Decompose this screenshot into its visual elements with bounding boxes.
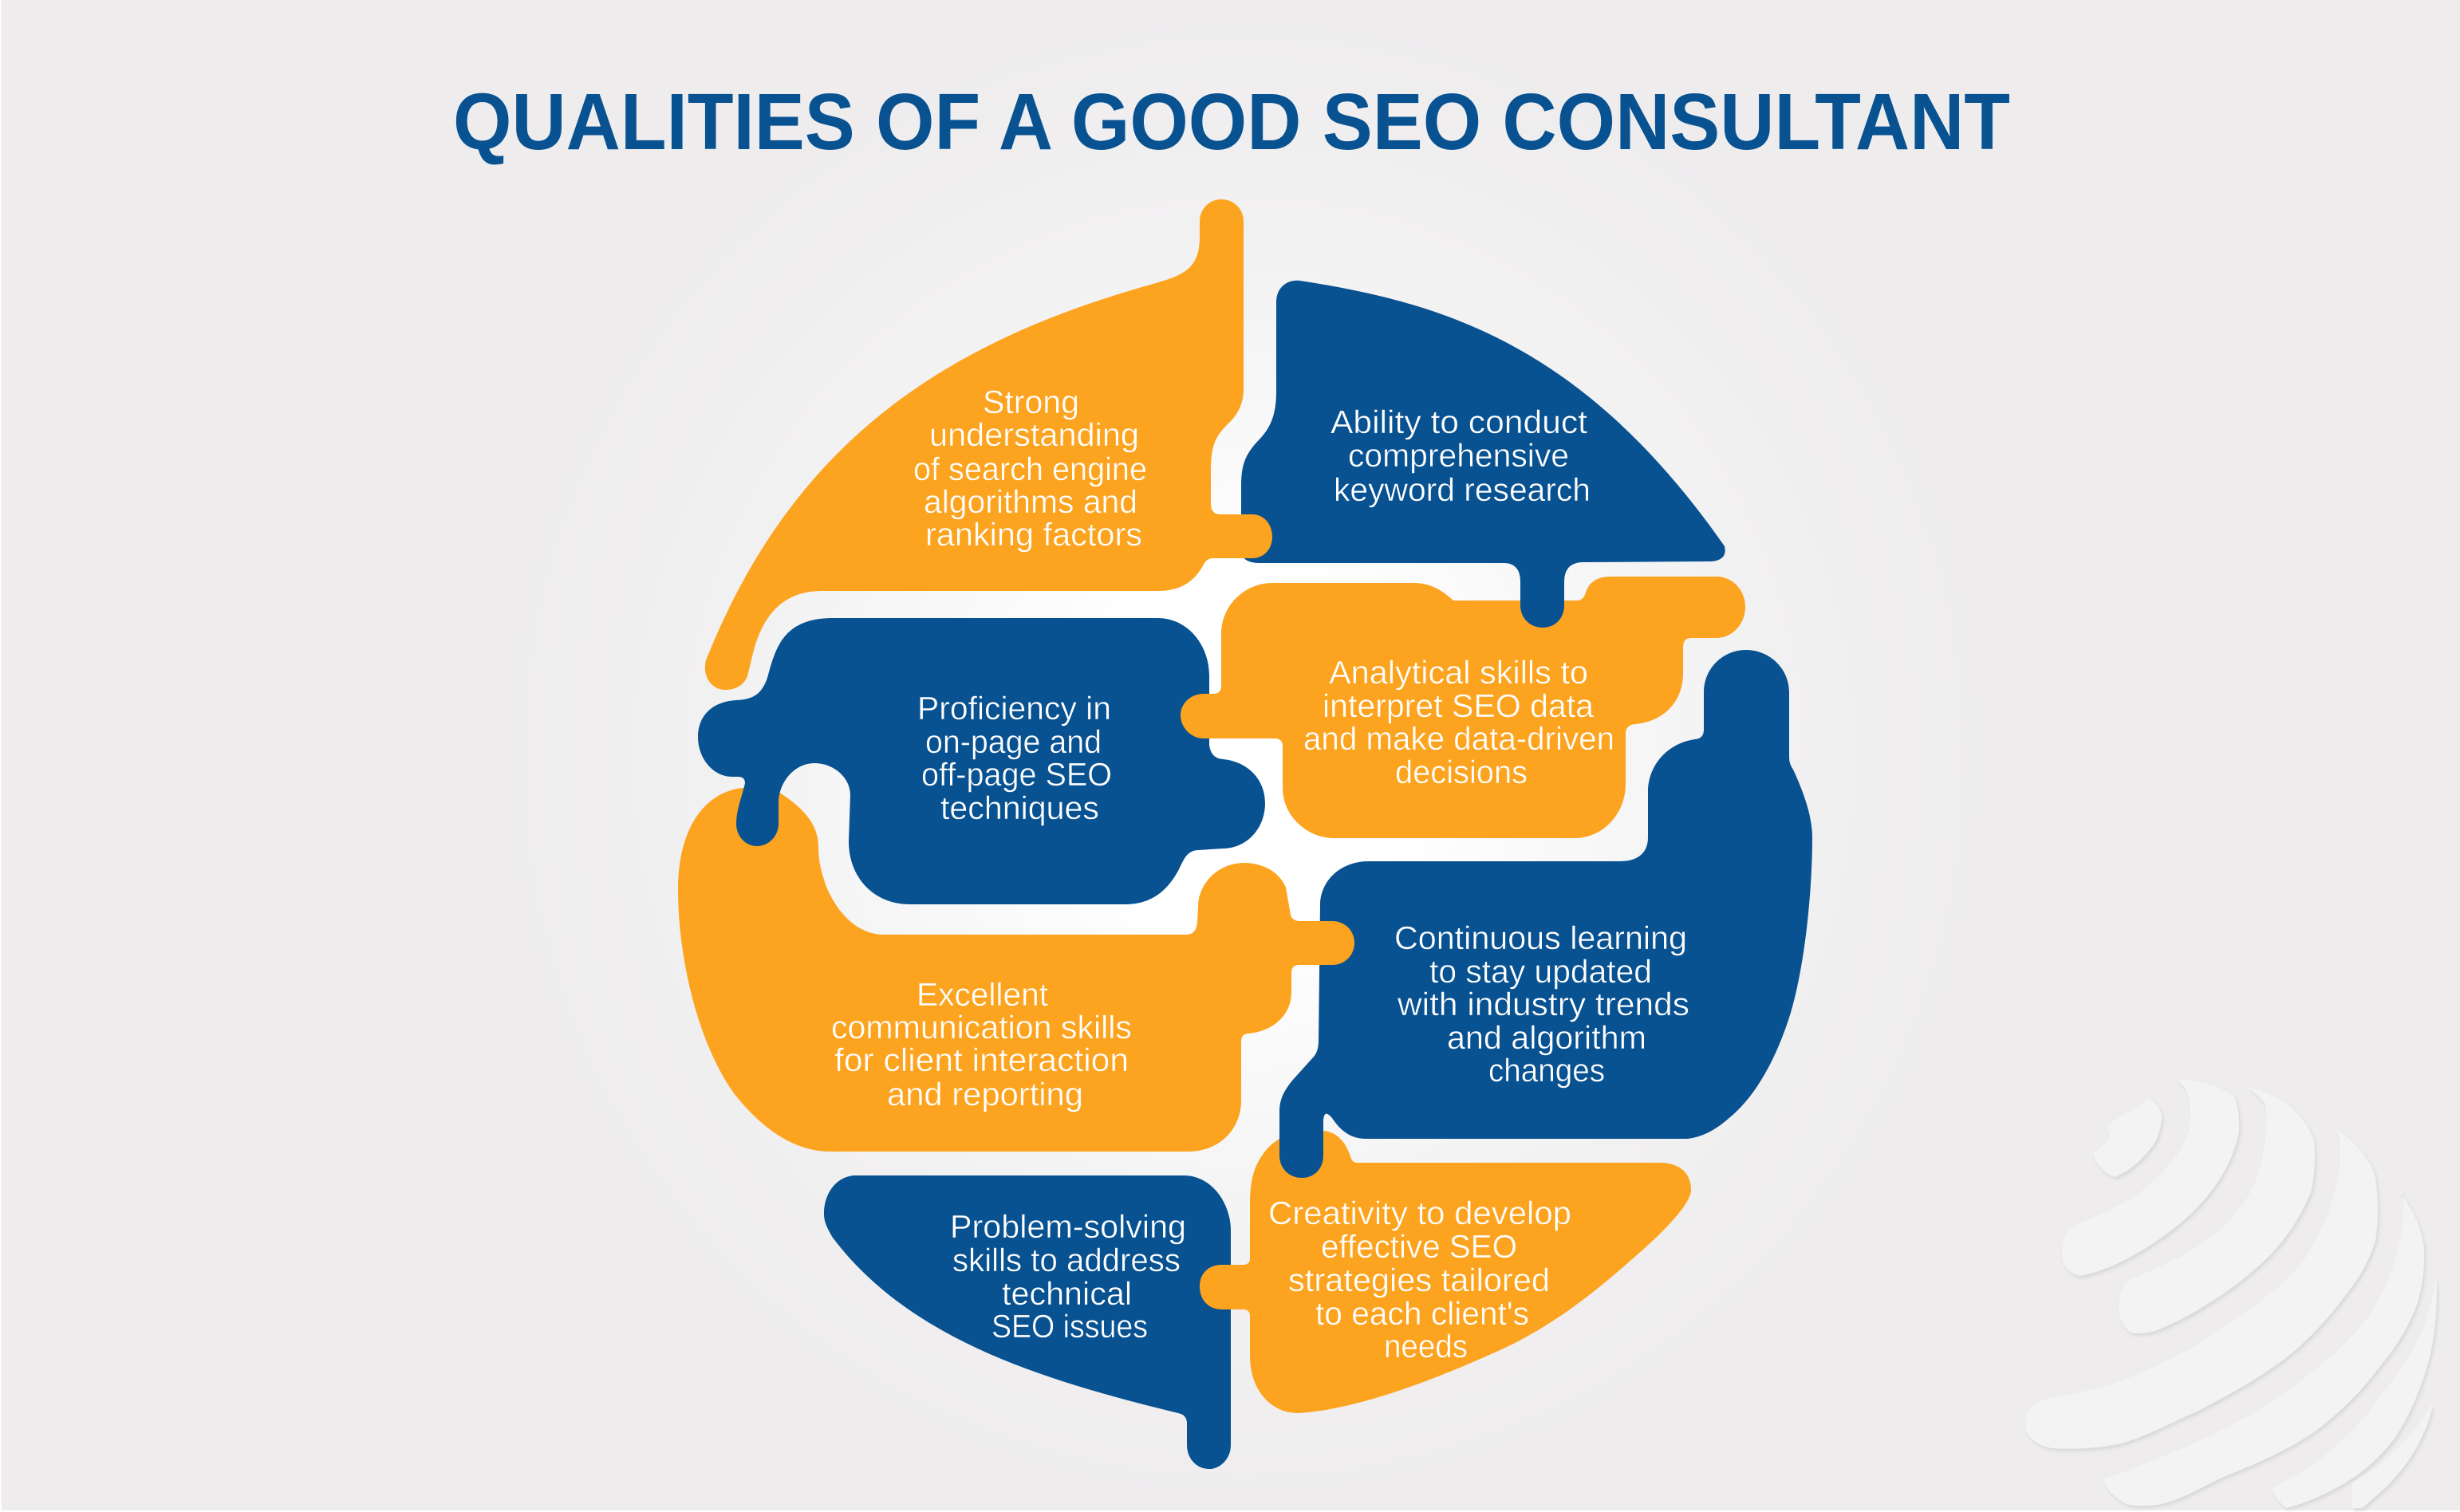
panel: search engine algorithms bbox=[705, 199, 1272, 690]
text: continuous learning: and algorithm bbox=[1447, 1019, 1646, 1056]
text: on-page and off-page: off-page SEO bbox=[921, 756, 1112, 793]
panel: analytical skills bbox=[1181, 577, 1745, 838]
shape: analytical skills bbox=[1181, 577, 1745, 838]
text: continuous learning: changes bbox=[1488, 1052, 1605, 1089]
text: search engine algorithms bbox=[913, 384, 1147, 553]
text: keyword research: comprehensive bbox=[1348, 437, 1569, 474]
text: keyword research: Ability to conduct bbox=[1331, 404, 1588, 440]
text: analytical skills bbox=[1303, 654, 1614, 790]
text: problem solving: technical bbox=[1002, 1275, 1132, 1312]
shape: keyword research bbox=[1241, 281, 1725, 628]
text: communication skills bbox=[831, 976, 1132, 1112]
text: creativity: effective SEO bbox=[1321, 1228, 1517, 1265]
text: continuous learning: Continuous learning bbox=[1394, 919, 1687, 956]
shape: problem solving bbox=[824, 1175, 1231, 1469]
shape: communication skills bbox=[678, 787, 1354, 1152]
text: search engine algorithms: ranking factors bbox=[925, 516, 1142, 553]
shape: search engine algorithms bbox=[705, 199, 1272, 690]
text: search engine algorithms: of search engine bbox=[913, 451, 1147, 487]
text: problem solving: Problem-solving bbox=[950, 1208, 1186, 1245]
watermark: globe bbox=[2025, 1079, 2437, 1508]
text: continuous learning bbox=[1394, 919, 1689, 1089]
text: creativity: to each client's bbox=[1315, 1295, 1529, 1332]
shape: on-page and off-page bbox=[698, 618, 1265, 904]
text: continuous learning: to stay updated bbox=[1429, 953, 1652, 990]
panel: continuous learning bbox=[1279, 650, 1812, 1178]
text: search engine algorithms: algorithms and bbox=[924, 483, 1137, 520]
text: creativity: needs bbox=[1384, 1328, 1468, 1364]
text: analytical skills: interpret SEO data bbox=[1323, 687, 1594, 724]
text: on-page and off-page: techniques bbox=[940, 789, 1099, 826]
panel: communication skills bbox=[678, 787, 1354, 1152]
panel: problem solving bbox=[824, 1175, 1231, 1469]
panel: keyword research bbox=[1241, 281, 1725, 628]
text: continuous learning: with industry trends bbox=[1397, 986, 1689, 1022]
text: keyword research: keyword research bbox=[1334, 471, 1591, 508]
text: on-page and off-page: Proficiency in bbox=[917, 690, 1111, 726]
text: on-page and off-page: on-page and bbox=[925, 723, 1102, 760]
text: search engine algorithms: Strong bbox=[983, 384, 1079, 420]
shape: continuous learning bbox=[1279, 650, 1812, 1178]
text: problem solving bbox=[950, 1208, 1186, 1345]
text: analytical skills: decisions bbox=[1395, 754, 1528, 790]
text: communication skills: Excellent bbox=[917, 976, 1049, 1013]
title: QUALITIES OF A GOOD SEO CONSULTANT bbox=[453, 77, 2010, 167]
text: creativity bbox=[1268, 1195, 1571, 1364]
shape: creativity bbox=[1200, 1130, 1691, 1413]
text: communication skills: and reporting bbox=[887, 1076, 1083, 1112]
text: analytical skills: Analytical skills to bbox=[1329, 654, 1588, 691]
text: search engine algorithms: understanding bbox=[929, 416, 1139, 453]
text: creativity: Creativity to develop bbox=[1268, 1195, 1571, 1231]
text: problem solving: SEO issues bbox=[991, 1308, 1148, 1345]
text: keyword research bbox=[1331, 404, 1591, 508]
panel: on-page and off-page bbox=[698, 618, 1265, 904]
text: problem solving: skills to address bbox=[952, 1242, 1181, 1278]
text: on-page and off-page bbox=[917, 690, 1112, 826]
text: analytical skills: and make data-driven bbox=[1303, 720, 1614, 757]
text: communication skills: for client interaction bbox=[834, 1041, 1129, 1078]
panel: creativity bbox=[1200, 1130, 1691, 1413]
text: creativity: strategies tailored bbox=[1288, 1262, 1550, 1298]
text: communication skills: communication skills bbox=[831, 1009, 1132, 1045]
